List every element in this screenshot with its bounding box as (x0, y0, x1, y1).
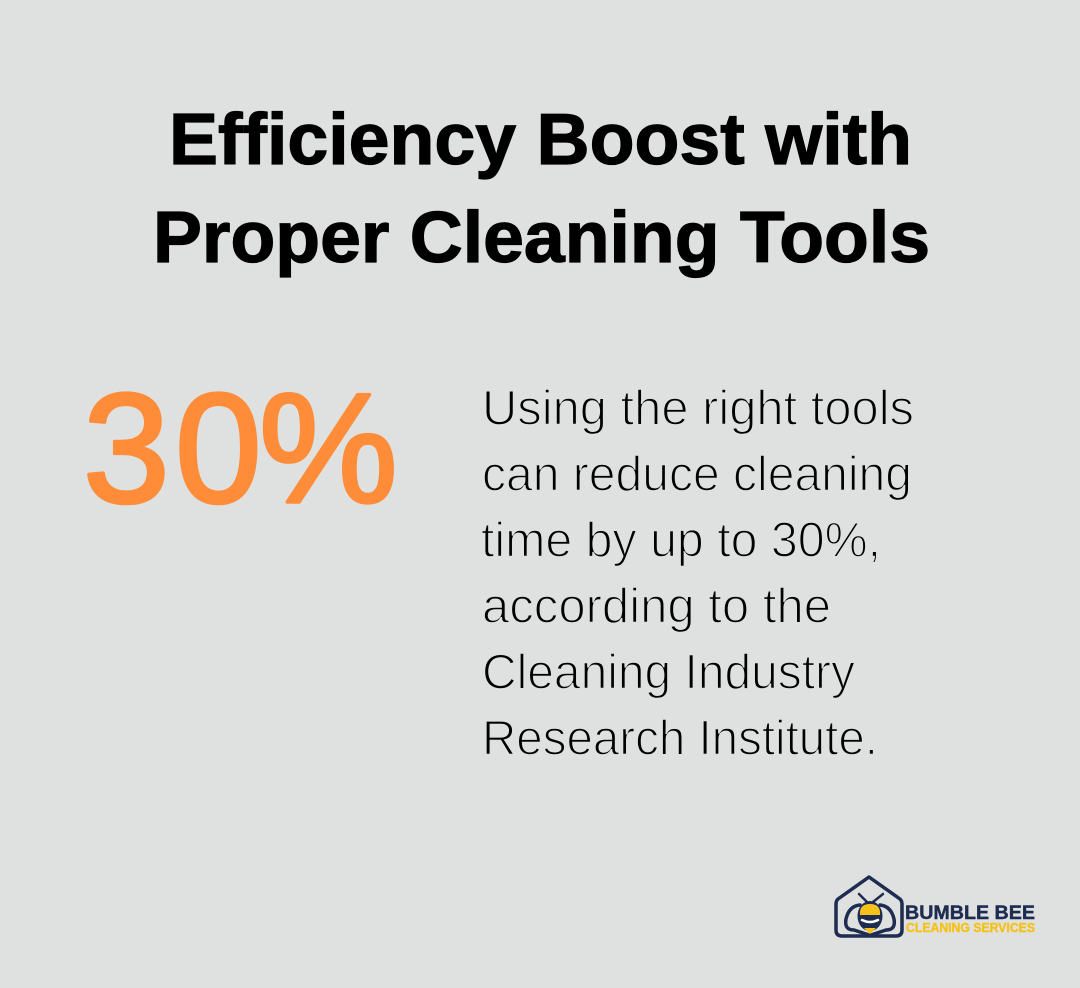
description text (481, 382, 914, 766)
title (153, 100, 930, 278)
title: Proper Cleaning Tools (153, 198, 930, 278)
description text: Using the right tools (482, 382, 914, 436)
title: Efficiency Boost with (169, 100, 912, 180)
description text: Cleaning Industry (482, 646, 855, 700)
logo tagline: CLEANING SERVICES (906, 921, 1035, 935)
logo: Bumble Bee Cleaning Services (836, 877, 1035, 936)
description text: can reduce cleaning (482, 448, 912, 502)
big statistic: 30%: 30% (83, 362, 398, 536)
description text: Research Institute. (482, 712, 878, 766)
logo wordmark: BUMBLE BEE (905, 903, 1035, 924)
description text: time by up to 30%, (481, 514, 881, 568)
icon: house with bee (836, 877, 902, 936)
description text: according to the (482, 580, 831, 634)
